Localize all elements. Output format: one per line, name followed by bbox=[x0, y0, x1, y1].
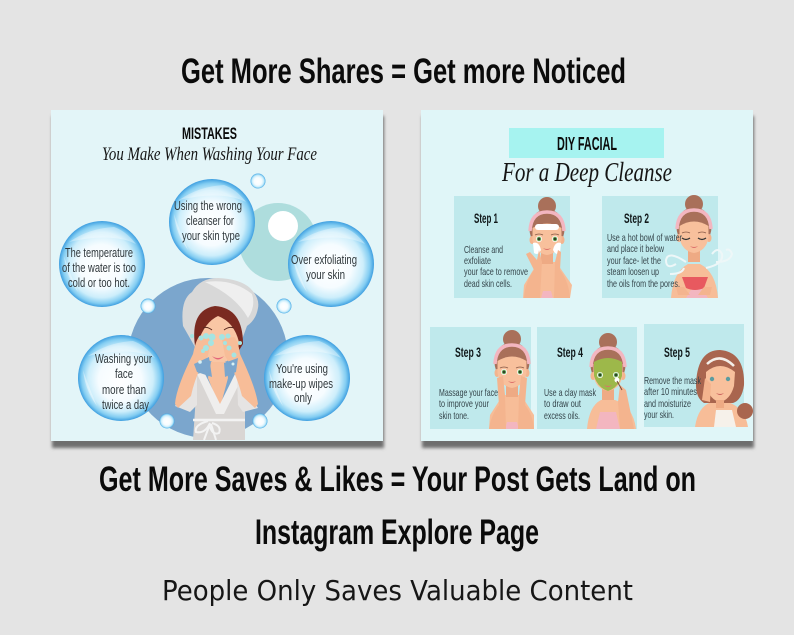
step 2 card: Step 2 bbox=[624, 211, 649, 226]
heading: instagram explore page: Instagram Explore Page bbox=[255, 513, 539, 552]
heading: get more shares: Get More Shares = Get more Noticed bbox=[181, 52, 626, 91]
step 5 card bbox=[644, 324, 753, 427]
step 2 card: Use a hot bowl of water bbox=[607, 232, 682, 244]
step 2 card: steam loosen up bbox=[607, 266, 659, 278]
step 2 illustration bbox=[666, 195, 732, 298]
panel: mistakes bbox=[51, 110, 384, 448]
step 5 card: Remove the mask bbox=[644, 375, 701, 387]
bubble: water temperature: of the water is too bbox=[62, 261, 136, 275]
step 1 card: your face to remove bbox=[464, 266, 528, 278]
bubble: over exfoliating: your skin bbox=[306, 268, 345, 282]
step 4 card bbox=[537, 327, 637, 429]
bubble: make-up wipes: only bbox=[294, 391, 313, 405]
step 4 card: Use a clay mask bbox=[544, 387, 597, 399]
illustration: woman washing face bbox=[175, 278, 258, 440]
step 4 illustration bbox=[587, 333, 636, 429]
step 5 illustration bbox=[695, 350, 753, 427]
step 1 illustration bbox=[523, 197, 572, 298]
bubble: washing too often bbox=[78, 335, 164, 421]
step 1 card: dead skin cells. bbox=[464, 278, 512, 290]
diy subtitle: For a Deep Cleanse bbox=[501, 157, 672, 187]
step 5 card: and moisturize bbox=[644, 398, 691, 410]
step 5 card: after 10 minutes bbox=[644, 386, 697, 398]
bubble: wrong cleanser: your skin type bbox=[182, 229, 240, 243]
step 3 card bbox=[430, 327, 534, 429]
step 3 card: Massage your face bbox=[439, 387, 498, 399]
bubble: water temperature: cold or too hot. bbox=[68, 276, 130, 290]
step 1 card: exfoliate bbox=[464, 255, 491, 267]
bubble: wrong cleanser: cleanser for bbox=[186, 214, 234, 228]
small bubbles bbox=[140, 174, 292, 428]
bubble: washing too often: face bbox=[115, 367, 133, 381]
step 1 card: Cleanse and bbox=[464, 244, 503, 256]
step 1 card bbox=[454, 196, 572, 298]
step 2 card bbox=[602, 195, 732, 298]
mistakes subtitle: You Make When Washing Your Face bbox=[102, 144, 317, 165]
decorative teal circle bbox=[239, 203, 317, 281]
title bar: diy facial bbox=[509, 128, 664, 158]
step 4 card: to draw out bbox=[544, 398, 581, 410]
blue backdrop circle bbox=[128, 278, 288, 438]
bubble: wrong cleanser bbox=[169, 179, 255, 265]
step 2 card: and place it below bbox=[607, 243, 664, 255]
step 5 card: your skin. bbox=[644, 409, 674, 421]
bubble: washing too often: more than bbox=[102, 383, 146, 397]
step 3 card: skin tone. bbox=[439, 410, 469, 422]
step 4 card: excess oils. bbox=[544, 410, 580, 422]
bubble: over exfoliating bbox=[288, 221, 374, 307]
step 3 card: Step 3 bbox=[455, 345, 481, 360]
bubble: water temperature bbox=[59, 221, 145, 307]
bubble: over exfoliating: Over exfoliating bbox=[291, 253, 357, 267]
bubble: wrong cleanser: Using the wrong bbox=[174, 199, 242, 213]
bubble: make-up wipes: You're using bbox=[276, 362, 328, 376]
mistakes title: MISTAKES bbox=[182, 124, 237, 143]
step 3 card: to improve your bbox=[439, 398, 489, 410]
step 4 card: Step 4 bbox=[557, 345, 583, 360]
panel: diy facial bbox=[421, 110, 754, 448]
bubble: make-up wipes bbox=[264, 335, 350, 421]
bubble: washing too often: twice a day bbox=[102, 398, 150, 412]
step 1 card: Step 1 bbox=[474, 211, 498, 226]
step 5 card: Step 5 bbox=[664, 345, 690, 360]
bubble: water temperature: The temperature bbox=[65, 246, 133, 260]
tagline: People Only Saves Valuable Content bbox=[162, 575, 633, 607]
title bar: diy facial: DIY FACIAL bbox=[557, 134, 617, 154]
bubble: make-up wipes: make-up wipes bbox=[269, 377, 333, 391]
step 3 illustration bbox=[489, 330, 534, 429]
step 2 card: your face- let the bbox=[607, 255, 661, 267]
step 2 card: the oils from the pores. bbox=[607, 278, 680, 290]
bubble: washing too often: Washing your bbox=[95, 352, 152, 366]
